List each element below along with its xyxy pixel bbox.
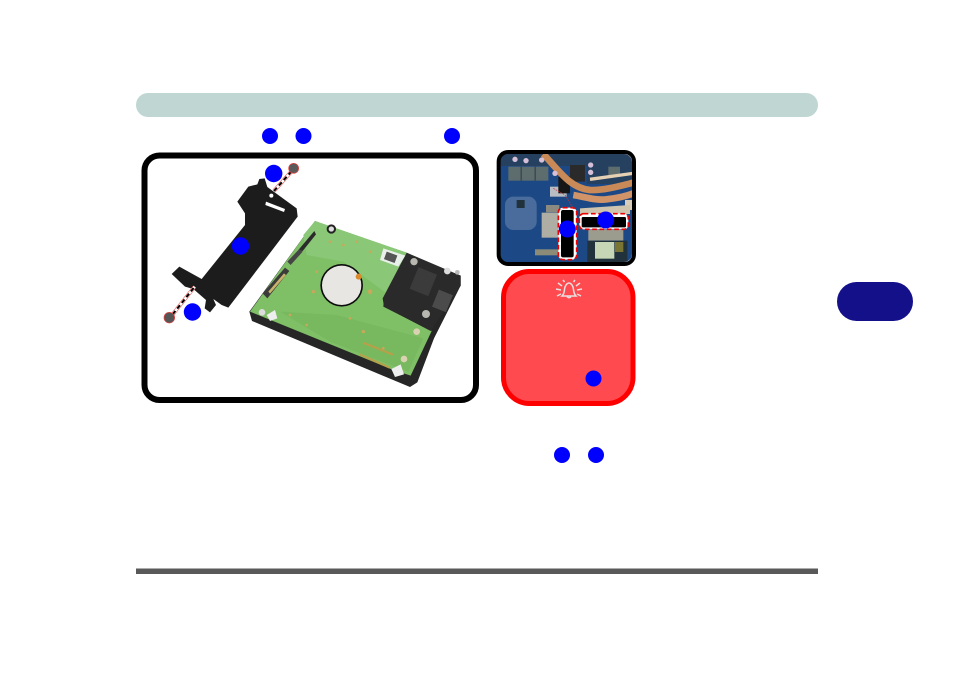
bracket slot [265, 202, 285, 212]
screw: bottom [164, 287, 195, 323]
header bar [136, 93, 818, 117]
footer rule [136, 568, 818, 574]
step markers in intro line [262, 128, 460, 144]
cable [553, 188, 573, 208]
panel: motherboard photo [499, 152, 634, 264]
panel frame [144, 156, 476, 400]
callout: warning [504, 272, 633, 404]
screw: top [274, 163, 299, 191]
panel: hard disk and bracket photo [144, 156, 476, 400]
connector cover: vertical [558, 208, 577, 260]
callout box [504, 272, 633, 404]
hard disk body [249, 221, 461, 387]
markers [559, 211, 614, 237]
panel markers [184, 165, 282, 321]
photo: parts [164, 163, 461, 387]
bracket [172, 178, 298, 312]
frame [499, 152, 634, 264]
step markers in lower text [554, 447, 604, 463]
callout marker [586, 370, 602, 386]
connector cover: horizontal [579, 214, 628, 229]
icon: alarm bell [556, 280, 582, 298]
board photo [499, 154, 633, 262]
chapter tab [837, 282, 913, 321]
